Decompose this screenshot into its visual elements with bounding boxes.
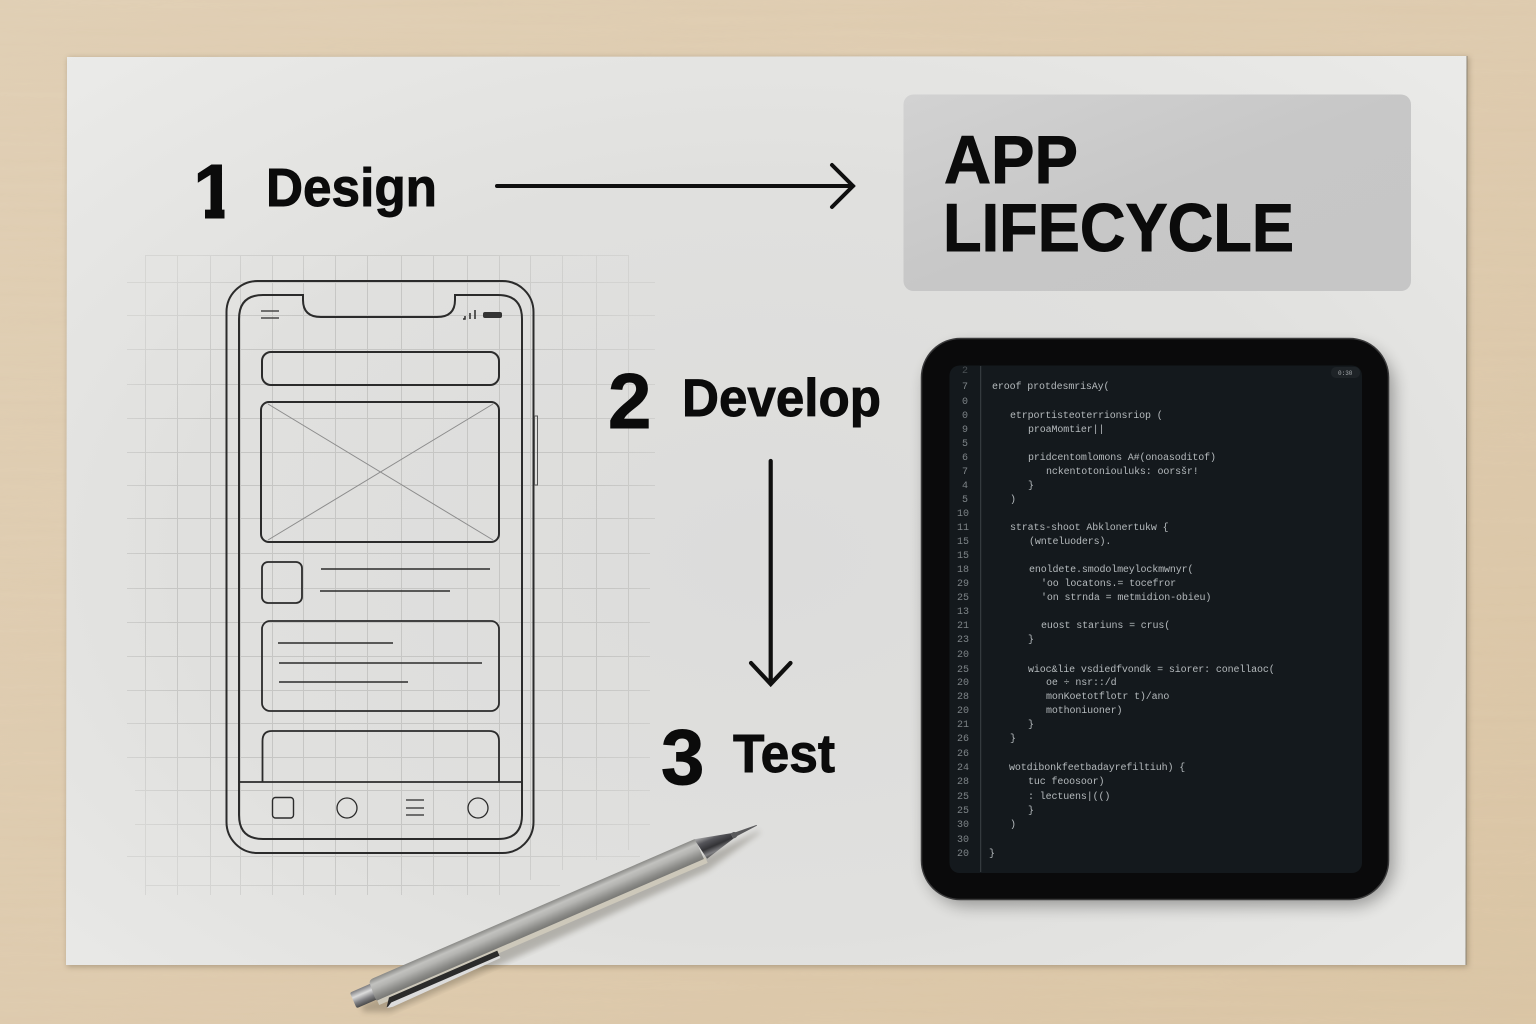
title text: LIFECYCLE: [943, 190, 1294, 266]
line numbers: 26: [957, 734, 969, 745]
phone wireframe: [226, 281, 538, 853]
code text: ): [1010, 494, 1016, 506]
line numbers: 21: [957, 621, 969, 632]
line numbers: 9: [962, 425, 968, 436]
code text: oe ÷ nsr::/d: [1046, 677, 1117, 689]
line numbers: 6: [962, 453, 968, 464]
side button: [534, 416, 538, 485]
step 3: test label: Test: [733, 724, 835, 784]
code text: wioc&lie vsdiedfvondk = siorer: conellaoc(: [1028, 664, 1275, 676]
lower card: [262, 731, 499, 782]
line numbers: 20: [957, 849, 969, 860]
code text: }: [1028, 634, 1034, 646]
phone inner screen with notch: [239, 295, 522, 839]
pencil shadow: [360, 831, 767, 1022]
status bar icons: [261, 310, 502, 319]
line numbers: 7: [962, 467, 968, 478]
code text: wotdibonkfeetbadayrefiltiuh) {: [1009, 762, 1185, 774]
code text: mothoniuoner): [1046, 705, 1122, 717]
search bar: [262, 352, 499, 385]
code text: proaMomtier||: [1028, 424, 1104, 436]
line numbers: 25: [957, 806, 969, 817]
pencil body: [368, 838, 708, 1005]
line numbers: 24: [957, 763, 969, 774]
title text: [943, 122, 1294, 266]
title text: APP: [944, 122, 1078, 198]
pencil end cap: [350, 983, 379, 1008]
title panel: [904, 94, 1411, 291]
code text: ): [1010, 819, 1016, 831]
wireframe grid: [127, 255, 655, 895]
step 1: design label: Design: [266, 158, 437, 218]
step 2: develop label: [608, 357, 881, 445]
line numbers: 5: [962, 495, 968, 506]
mechanical pencil: [348, 814, 767, 1024]
step 2: develop label: Develop: [682, 369, 881, 428]
line numbers: 7: [962, 382, 968, 393]
text card: [262, 621, 499, 711]
line numbers: 23: [957, 635, 969, 646]
line numbers: 28: [957, 692, 969, 703]
code text: }: [1010, 733, 1016, 745]
pencil clip: [383, 951, 501, 1009]
code text: euost stariuns = crus(: [1041, 620, 1170, 632]
code text: [989, 381, 1275, 860]
code text: etrportisteoterrionsriop (: [1010, 410, 1163, 422]
line numbers: 15: [957, 551, 969, 562]
line numbers: 20: [957, 706, 969, 717]
line numbers: 25: [957, 593, 969, 604]
step 2: develop label: 2: [608, 357, 651, 445]
code text: strats-shoot Abklonertukw {: [1010, 522, 1169, 534]
line numbers: 13: [957, 607, 969, 618]
status pill: [1331, 367, 1360, 378]
line numbers: 10: [957, 509, 969, 520]
code text: enoldete.smodolmeylockmwnyr(: [1029, 564, 1193, 576]
line numbers: 30: [957, 835, 969, 846]
arrow: develop to test: [751, 461, 790, 684]
gutter divider: [980, 366, 982, 872]
line numbers: 25: [957, 792, 969, 803]
avatar with text lines: [262, 562, 490, 603]
step 1: design label: [198, 164, 434, 218]
line numbers: 21: [957, 720, 969, 731]
image placeholder: [261, 402, 499, 542]
tab bar: [239, 782, 522, 818]
line numbers: 5: [962, 439, 968, 450]
line numbers: 30: [957, 820, 969, 831]
line numbers: 4: [962, 481, 968, 492]
line numbers: 26: [957, 749, 969, 760]
step 3: test label: [661, 713, 835, 801]
line numbers: 25: [957, 665, 969, 676]
tablet with code: [922, 338, 1394, 906]
code text: tuc feoosoor): [1028, 776, 1104, 788]
step 3: test label: 3: [661, 713, 704, 801]
code text: eroof protdesmrisAy(: [992, 381, 1109, 393]
code text: }: [1028, 480, 1034, 492]
line numbers: [957, 366, 969, 860]
code text: (wnteluoders).: [1029, 536, 1111, 548]
pencil tip: [731, 823, 758, 839]
line numbers: 0: [962, 411, 968, 422]
line numbers: 15: [957, 537, 969, 548]
code text: }: [1028, 805, 1034, 817]
code text: }: [989, 848, 995, 860]
phone outer body: [226, 281, 534, 853]
arrow: design to lifecycle: [497, 165, 853, 207]
line numbers: 18: [957, 565, 969, 576]
tablet screen: [950, 366, 1362, 873]
code text: : lectuens|((): [1028, 791, 1110, 803]
line numbers: 20: [957, 678, 969, 689]
code text: nckentotoniouluks: oorsšr!: [1046, 466, 1199, 478]
code text: pridcentomlomons A#(onoasoditof): [1028, 452, 1216, 464]
line numbers: 29: [957, 579, 969, 590]
line numbers: 0: [962, 397, 968, 408]
line numbers: 11: [957, 523, 969, 534]
line numbers: 20: [957, 650, 969, 661]
line numbers: 28: [957, 777, 969, 788]
pencil cone: [694, 825, 736, 860]
code text: }: [1028, 719, 1034, 731]
code text: 'oo locatons.= tocefror: [1041, 578, 1176, 590]
tablet body: [922, 338, 1388, 900]
status pill: 0:30: [1338, 370, 1353, 377]
code text: 'on strnda = metmidion-obieu): [1041, 592, 1211, 604]
line numbers: 2: [962, 366, 968, 377]
code text: monKoetotflotr t)/ano: [1046, 691, 1169, 703]
step 1: design label: 1: [193, 149, 236, 235]
